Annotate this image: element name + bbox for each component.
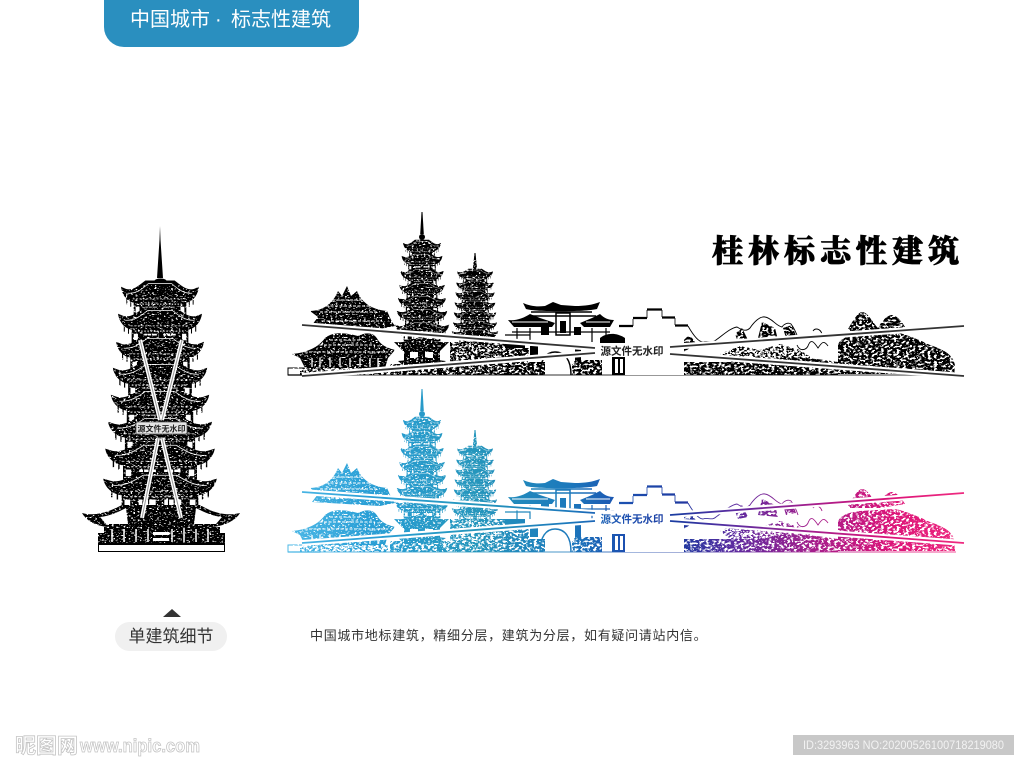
title: 桂林标志性建筑 — [712, 234, 964, 269]
header tab: 中国城市 — [130, 9, 210, 31]
colour skyline label: 源文件无水印 — [600, 512, 664, 526]
image id stamp — [793, 735, 1014, 755]
caption: 中国城市地标建筑，精细分层，建筑为分层，如有疑问请站内信。 — [310, 628, 707, 643]
header tab: · — [215, 9, 222, 31]
pointer triangle — [163, 609, 181, 617]
pill label: 单建筑细节 — [128, 627, 214, 646]
pagoda spire — [154, 226, 166, 284]
header tab — [104, 0, 359, 47]
black skyline — [288, 212, 964, 376]
pagoda base hall — [82, 285, 240, 552]
site logo watermark: 昵图网 — [15, 735, 78, 758]
black skyline watermark bands — [302, 325, 964, 376]
pagoda watermark lines — [140, 340, 182, 518]
site url watermark: www.nipic.com — [79, 736, 200, 756]
colour gradient skyline — [285, 385, 970, 560]
header tab: 标志性建筑 — [231, 9, 331, 31]
colour skyline watermark bands — [302, 492, 964, 543]
large pagoda detail — [82, 226, 240, 552]
pagoda tiers — [103, 280, 217, 509]
pill label — [115, 622, 227, 651]
pagoda watermark label: 源文件无水印 — [138, 424, 186, 434]
image id stamp: ID:3293963 NO:20200526100718219080 — [803, 740, 1004, 752]
black skyline label: 源文件无水印 — [600, 344, 664, 358]
